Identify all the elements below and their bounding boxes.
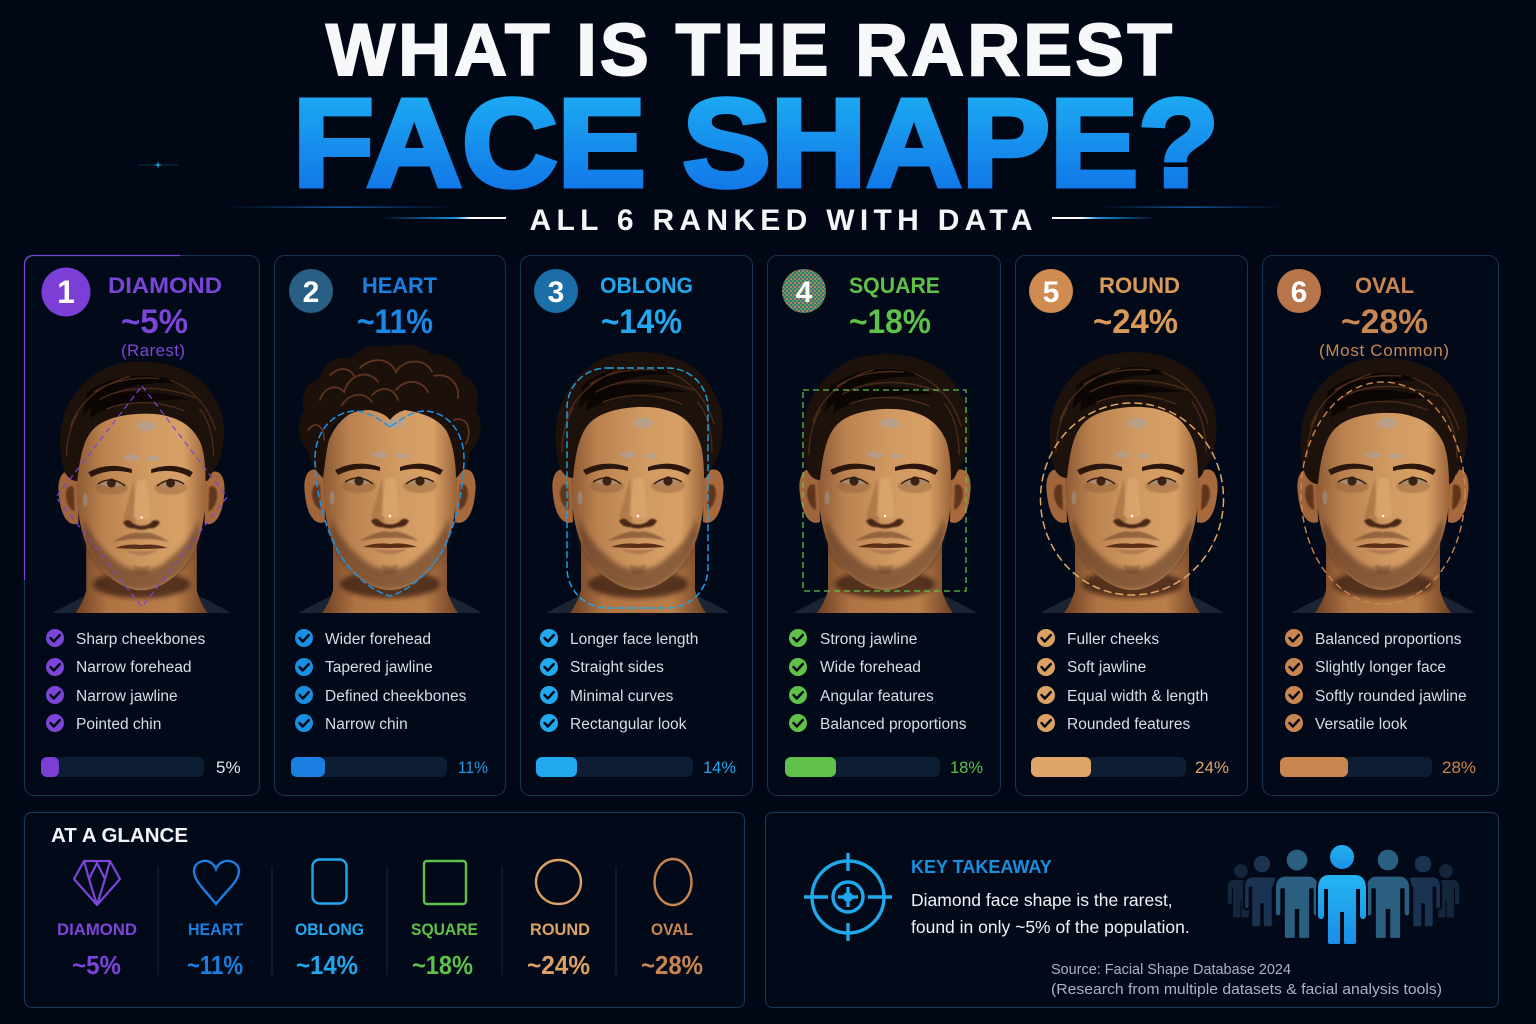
heading: oblong: OBLONG xyxy=(600,273,693,298)
traits: round xyxy=(1037,629,1208,733)
panel: oblong card xyxy=(520,256,752,796)
heading: square: SQUARE xyxy=(849,273,940,298)
icon: heart xyxy=(194,861,239,904)
title xyxy=(293,10,1219,213)
progress bar: 5% xyxy=(41,757,241,777)
stat: oval xyxy=(641,920,703,980)
progress bar: 24% xyxy=(1031,757,1229,777)
stat: round: ROUND xyxy=(530,920,590,939)
icon: round xyxy=(536,860,581,904)
stat: oval: OVAL xyxy=(651,920,693,939)
stat: heart: HEART xyxy=(188,920,244,939)
heading: oval: OVAL xyxy=(1355,273,1414,298)
progress bar: 11%: 11% xyxy=(458,758,488,777)
traits: square: Strong jawline xyxy=(820,631,917,648)
progress bar: 28%: 28% xyxy=(1442,758,1476,777)
icon: square xyxy=(424,861,466,904)
traits: round: Soft jawline xyxy=(1067,659,1146,676)
percentage: diamond: ~5% xyxy=(121,303,188,341)
stat: square xyxy=(411,920,478,980)
decorative sparkle xyxy=(138,161,178,169)
rank badge 1 xyxy=(42,268,90,316)
stat: diamond xyxy=(57,920,137,980)
progress bar: 5%: 5% xyxy=(216,758,241,777)
icon: oblong xyxy=(312,860,346,904)
progress bar: 14%: 14% xyxy=(703,758,736,777)
rank badge 4 xyxy=(782,269,826,313)
traits: square: Balanced proportions xyxy=(820,716,967,733)
traits: oblong xyxy=(540,629,698,733)
traits: heart: Tapered jawline xyxy=(325,659,433,676)
heading: at a glance: AT A GLANCE xyxy=(51,825,188,847)
panel: square card xyxy=(768,256,1000,796)
stat: diamond: DIAMOND xyxy=(57,920,137,939)
traits: oblong: Rectangular look xyxy=(570,716,687,733)
panel: at a glance xyxy=(24,812,744,1008)
note: most common: (Most Common) xyxy=(1319,341,1449,360)
panel: heart card xyxy=(274,256,506,796)
percentage: heart: ~11% xyxy=(357,303,433,341)
stat: round: ~24% xyxy=(527,950,590,980)
rank badge 1: 1 xyxy=(57,274,75,310)
heading: diamond: DIAMOND xyxy=(108,273,222,298)
portrait with diamond outline xyxy=(52,362,231,613)
heading: round: ROUND xyxy=(1099,273,1180,298)
rank badge 5 xyxy=(1029,269,1073,313)
portrait with oblong outline xyxy=(546,352,730,613)
panel: oval card xyxy=(1262,256,1498,796)
traits: square: Angular features xyxy=(820,688,934,705)
rank badge 5: 5 xyxy=(1043,276,1059,309)
rank badge 6: 6 xyxy=(1291,276,1307,309)
traits: oval: Versatile look xyxy=(1315,716,1407,733)
traits: diamond xyxy=(46,629,206,733)
stat: round xyxy=(527,920,590,980)
source note: (Research from multiple datasets & facial analysis tools) xyxy=(1051,982,1442,998)
stat: oval: ~28% xyxy=(641,950,703,980)
stat: heart: ~11% xyxy=(187,950,243,980)
stat: square: SQUARE xyxy=(411,920,478,939)
rank badge 6 xyxy=(1277,269,1321,313)
traits: oblong: Longer face length xyxy=(570,631,698,648)
rank badge 3 xyxy=(534,269,578,313)
traits: square: Wide forehead xyxy=(820,659,921,676)
rank badge 2 xyxy=(289,269,333,313)
rank badge 2: 2 xyxy=(303,276,319,309)
percentage: square: ~18% xyxy=(849,303,931,341)
progress bar: 28% xyxy=(1280,757,1476,777)
subtitle: ALL 6 RANKED WITH DATA xyxy=(530,204,1032,237)
progress bar: 18% xyxy=(785,757,983,777)
panel: diamond card xyxy=(24,256,260,796)
takeaway text xyxy=(911,890,1190,937)
note: rarest: (Rarest) xyxy=(121,341,185,360)
title: WHAT IS THE RAREST xyxy=(326,10,1172,91)
traits: heart: Defined cheekbones xyxy=(325,688,467,705)
title: FACE SHAPE? xyxy=(293,74,1219,213)
traits: round: Fuller cheeks xyxy=(1067,631,1159,648)
traits: oblong: Minimal curves xyxy=(570,688,674,705)
heading: heart: HEART xyxy=(362,273,438,298)
icon: oval xyxy=(654,859,692,905)
heading: key takeaway: KEY TAKEAWAY xyxy=(911,857,1052,877)
traits: heart xyxy=(295,629,467,733)
portrait with square outline xyxy=(793,354,977,613)
progress bar: 24%: 24% xyxy=(1195,758,1229,777)
traits: diamond: Narrow forehead xyxy=(76,659,191,676)
source note xyxy=(1051,962,1442,998)
stat: oblong: OBLONG xyxy=(295,920,364,939)
portrait with heart outline xyxy=(298,345,482,613)
stat: oblong xyxy=(295,920,364,980)
traits: diamond: Narrow jawline xyxy=(76,688,178,705)
traits: oval: Balanced proportions xyxy=(1315,631,1462,648)
icon: target xyxy=(804,853,892,941)
traits: heart: Wider forehead xyxy=(325,631,431,648)
progress bar: 11% xyxy=(291,757,488,777)
source note: Source: Facial Shape Database 2024 xyxy=(1051,962,1291,978)
stat: square: ~18% xyxy=(412,950,473,980)
traits: square xyxy=(789,629,967,733)
portrait with round outline xyxy=(1040,352,1224,613)
traits: round: Rounded features xyxy=(1067,716,1190,733)
progress bar: 18%: 18% xyxy=(950,758,983,777)
takeaway text: Diamond face shape is the rarest, xyxy=(911,890,1173,910)
traits: heart: Narrow chin xyxy=(325,716,408,733)
takeaway text: found in only ~5% of the population. xyxy=(911,917,1190,937)
traits: oval: Softly rounded jawline xyxy=(1315,688,1467,705)
percentage: oval: ~28% xyxy=(1341,303,1428,341)
traits: diamond: Sharp cheekbones xyxy=(76,631,206,648)
stat: oblong: ~14% xyxy=(296,950,358,980)
traits: oval: Slightly longer face xyxy=(1315,659,1446,676)
percentage: oblong: ~14% xyxy=(601,303,682,341)
dividers xyxy=(158,866,616,975)
rank badge 3: 3 xyxy=(548,276,564,309)
icon: diamond xyxy=(74,861,120,905)
traits: oblong: Straight sides xyxy=(570,659,664,676)
traits: diamond: Pointed chin xyxy=(76,716,161,733)
portrait with oval outline xyxy=(1291,358,1475,613)
traits: round: Equal width & length xyxy=(1067,688,1208,705)
stat: diamond: ~5% xyxy=(72,950,121,980)
percentage: round: ~24% xyxy=(1093,303,1178,341)
stat: heart xyxy=(187,920,244,980)
rank badge 4: 4 xyxy=(796,276,813,309)
progress bar: 14% xyxy=(536,757,736,777)
panel: key takeaway xyxy=(766,812,1498,1008)
traits: oval xyxy=(1285,629,1467,733)
icon: crowd of people xyxy=(1228,844,1459,945)
panel: round card xyxy=(1016,256,1248,796)
